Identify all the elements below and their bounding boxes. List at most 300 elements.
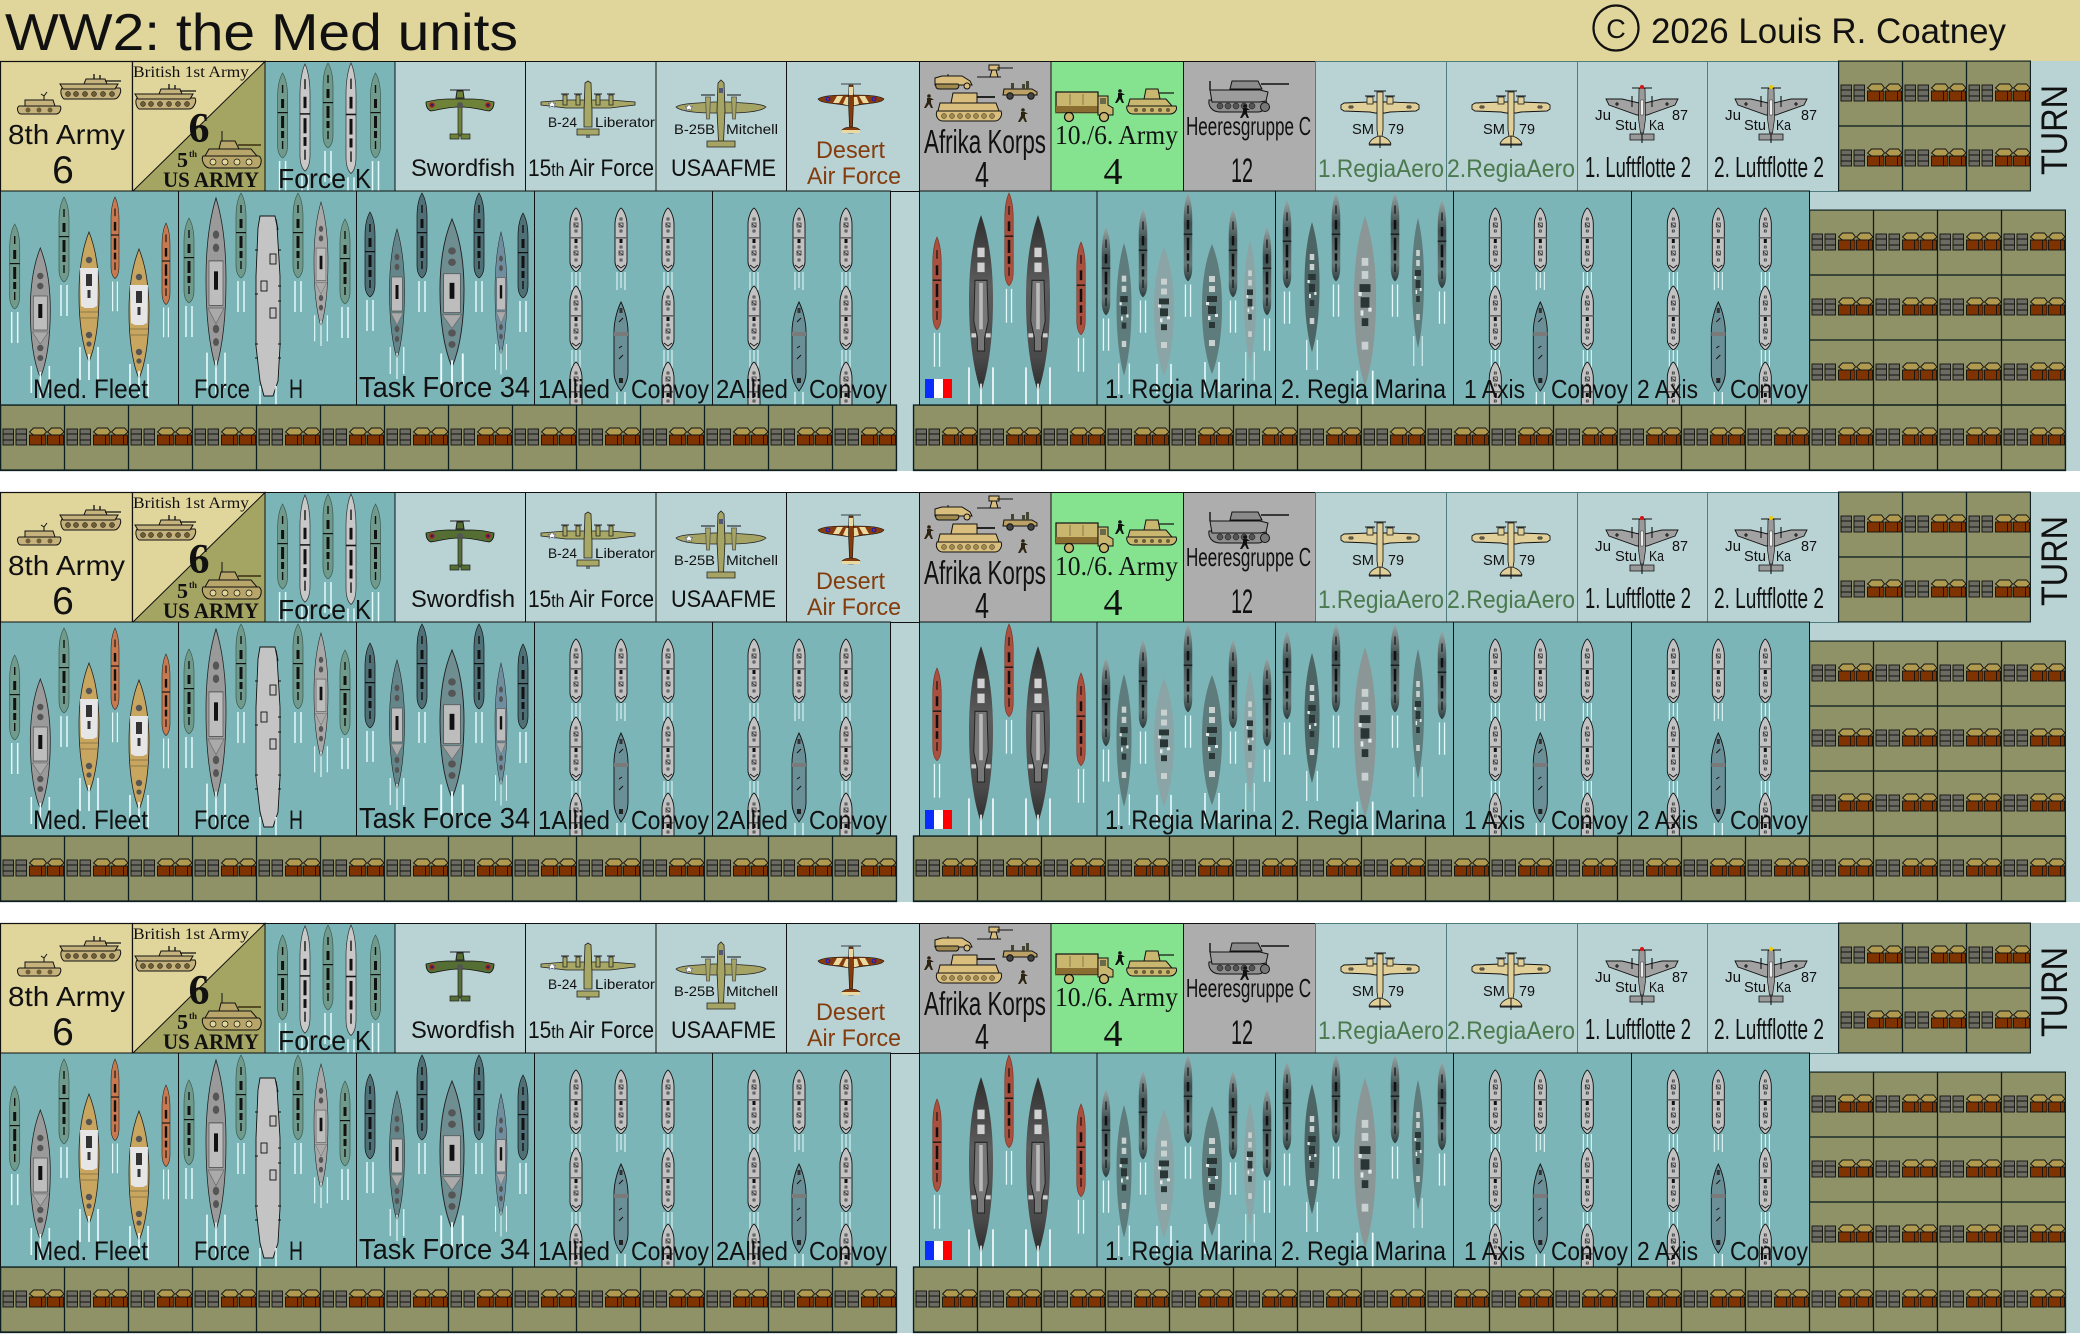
ships (184, 1055, 350, 1268)
text: British 1st Army, 6, 5th US ARMY: 5 (177, 148, 188, 172)
text: Force H: Force (194, 374, 250, 404)
text: Desert Air Force: Air Force (807, 163, 901, 190)
text: Ju 87 Stuka, 1. Luftflotte 2: Ju (1595, 107, 1611, 124)
ships (748, 1070, 852, 1306)
text: 2Allied Convoy (716, 374, 887, 404)
icon: Ju 87 Stuka (1606, 947, 1678, 1005)
icon: B-24 Liberator (541, 512, 635, 569)
text: 15th Air Force (528, 545, 655, 613)
panel: 1 Allied Convoy (534, 191, 712, 444)
supply cells: bottom left (0, 1267, 896, 1332)
text: 2Allied Convoy (716, 1236, 887, 1266)
text: British 1st Army, 6, 5th US ARMY: th (189, 580, 197, 590)
background strip (0, 492, 2080, 902)
text: 15th Air Force: Liberator (595, 545, 655, 561)
text: Ju 87 Stuka, 1. Luftflotte 2: Stu (1615, 117, 1637, 134)
text: 8th Army 6: 6 (52, 580, 74, 623)
ships (1667, 1070, 1771, 1306)
panel: 2 Allied Convoy (712, 1053, 890, 1306)
icon: Ju 87 Stuka (1735, 516, 1807, 574)
text: 1 Axis Convoy (1464, 374, 1628, 404)
text: 2 Axis Convoy: Convoy (1730, 805, 1808, 835)
text: British 1st Army, 6, 5th US ARMY (133, 64, 259, 192)
text: Force K: K (355, 163, 371, 194)
text: 10./6. Army 4: 4 (1104, 582, 1122, 624)
panel: 1. Regia Marina (1097, 191, 1276, 405)
ships (365, 624, 528, 821)
text: USAAFME (671, 121, 778, 182)
ships (933, 193, 1085, 419)
panel: 2 Axis Convoy (1632, 622, 1810, 875)
text: 15th Air Force: B-24 (548, 114, 577, 130)
icon: truck, soldier and tank (1055, 951, 1177, 984)
unit sheet 3 (0, 923, 2080, 1333)
supply cells: bottom right (914, 405, 2066, 470)
text: 2 Axis Convoy (1637, 805, 1808, 835)
text: 1Allied Convoy: Convoy (631, 1236, 709, 1266)
ships (748, 208, 852, 444)
panel: 2. Regia Marina (1276, 191, 1454, 410)
text: Ju 87 Stuka, 1. Luftflotte 2: Ka (1649, 548, 1665, 565)
ships (570, 639, 674, 875)
text: 2 Axis Convoy (1637, 1236, 1808, 1266)
supply cells: bottom right (914, 1267, 2066, 1332)
copyright notice: C (1606, 14, 1626, 44)
panel: 1 Axis Convoy (1454, 191, 1632, 444)
text: Force H (194, 1236, 303, 1266)
text: British 1st Army, 6, 5th US ARMY: US ARMY (163, 167, 259, 192)
text: Desert Air Force: Air Force (807, 594, 901, 621)
text: Heeresgruppe C 12 (1186, 542, 1311, 621)
panel: 15th Air Force (526, 924, 656, 1054)
text: USAAFME: B-25B (674, 121, 715, 137)
text: 1 Axis Convoy: Convoy (1551, 1236, 1628, 1266)
text: USAAFME: USAAFME (671, 1017, 776, 1044)
text: Afrika Korps 4: Afrika Korps (924, 985, 1046, 1022)
text: SM 79, 1.RegiaAero: 79 (1388, 983, 1404, 1000)
text: USAAFME: Mitchell (726, 983, 778, 999)
text: Ju 87 Stuka, 2. Luftflotte 2: 87 (1801, 107, 1817, 124)
text: Ju 87 Stuka, 2. Luftflotte 2: Ju (1725, 538, 1741, 555)
text: SM 79, 1.RegiaAero: 79 (1388, 552, 1404, 569)
panel: 2 Axis Convoy (1632, 191, 1810, 444)
icon: French flag (925, 1241, 952, 1260)
text: SM 79, 1.RegiaAero: SM (1352, 121, 1374, 138)
text: Afrika Korps 4 (924, 985, 1046, 1057)
ships (1102, 1055, 1271, 1256)
text: 1Allied Convoy (538, 1236, 709, 1266)
text: Force K: K (355, 594, 371, 625)
text: SM 79, 2.RegiaAero (1447, 121, 1575, 183)
panel: 1 Allied Convoy (534, 622, 712, 875)
icon: B-24 Liberator (541, 81, 635, 138)
text: Ju 87 Stuka, 2. Luftflotte 2: Stu (1744, 548, 1766, 565)
text: 2. Regia Marina: 2. Regia Marina (1281, 374, 1447, 404)
text: Heeresgruppe C 12: 12 (1231, 583, 1253, 621)
text: Heeresgruppe C 12: 12 (1231, 152, 1253, 190)
text: USAAFME: B-25B (674, 552, 715, 568)
text: USAAFME: USAAFME (671, 155, 776, 182)
panel: 1. Regia Marina (1097, 1053, 1276, 1267)
panel: Task Force 34 (356, 622, 534, 836)
ships (1283, 1055, 1446, 1272)
icon: truck, soldier and tank (1055, 89, 1177, 122)
text: 2 Axis Convoy: 2 Axis (1637, 374, 1698, 404)
text: Ju 87 Stuka, 2. Luftflotte 2: 87 (1801, 538, 1817, 555)
text: 2 Axis Convoy: Convoy (1730, 1236, 1808, 1266)
panel: 10./6. Army (1051, 924, 1184, 1055)
text: 15th Air Force: B-24 (548, 976, 577, 992)
text: Desert Air Force: Desert (816, 568, 885, 595)
icon: French flag (925, 379, 952, 398)
panel: Heeresgruppe C (1184, 924, 1316, 1054)
text: Ju 87 Stuka, 2. Luftflotte 2: Ka (1776, 979, 1792, 996)
icon: truck, soldier and tank (1055, 520, 1177, 552)
text: Afrika Korps 4: Afrika Korps (924, 554, 1046, 591)
background strip (0, 923, 2080, 1333)
ships (1489, 639, 1593, 875)
ships (365, 1055, 528, 1252)
text: 15th Air Force: 15th Air Force (528, 1017, 654, 1044)
text: SM 79, 1.RegiaAero: 1.RegiaAero (1318, 1017, 1444, 1045)
text: 2 Axis Convoy: Convoy (1730, 374, 1808, 404)
text: Heeresgruppe C 12 (1186, 111, 1311, 190)
panel: 1.RegiaAero (1316, 924, 1446, 1054)
icon: tanks (18, 505, 121, 545)
panel: 2. Luftflotte 2 (1708, 924, 1838, 1054)
text: 2 Axis Convoy: 2 Axis (1637, 1236, 1698, 1266)
text: 1 Axis Convoy (1464, 805, 1628, 835)
ships (1102, 624, 1271, 825)
text: 2 Axis Convoy (1637, 374, 1808, 404)
background strip (0, 61, 2080, 471)
text: Task Force 34: Task Force 34 (359, 372, 530, 404)
text: SM 79, 1.RegiaAero: 1.RegiaAero (1318, 586, 1444, 614)
supply cells: right block (1810, 1072, 2066, 1267)
panel: Task Force 34 (356, 1053, 534, 1267)
icon: Ju 87 Stuka (1735, 947, 1807, 1005)
text: Ju 87 Stuka, 1. Luftflotte 2: 87 (1672, 538, 1688, 555)
text: 10./6. Army 4: 10./6. Army (1055, 120, 1178, 150)
text: 1. Regia Marina: 1. Regia Marina (1105, 1236, 1273, 1266)
text: SM 79, 1.RegiaAero (1318, 552, 1444, 614)
text: 1 Axis Convoy: 1 Axis (1464, 1236, 1525, 1266)
text: 1. Regia Marina: 1. Regia Marina (1105, 374, 1273, 404)
text: 1 Axis Convoy: 1 Axis (1464, 805, 1525, 835)
text: Heeresgruppe C 12: Heeresgruppe C (1186, 542, 1311, 572)
text: Afrika Korps 4: 4 (975, 585, 989, 626)
title: WW2: the Med units (5, 4, 518, 62)
text: 1Allied Convoy: 1Allied (538, 805, 610, 835)
text: Ju 87 Stuka, 2. Luftflotte 2: Ka (1776, 117, 1792, 134)
text: British 1st Army, 6, 5th US ARMY: 6 (188, 968, 210, 1014)
panel: 2 Allied Convoy (712, 622, 890, 875)
icon: tanks (135, 515, 261, 599)
text: Ju 87 Stuka, 2. Luftflotte 2: Ka (1776, 548, 1792, 565)
icon: B-25B Mitchell (676, 511, 766, 578)
panel: 2. Luftflotte 2 (1708, 492, 1838, 622)
text: SM 79, 2.RegiaAero: 2.RegiaAero (1447, 1017, 1575, 1045)
text: 10./6. Army 4 (1055, 551, 1178, 624)
icon: tanks (18, 74, 121, 114)
text: SM 79, 2.RegiaAero: SM (1483, 121, 1505, 138)
icon: SM 79 (1341, 953, 1419, 1010)
panel: 2.RegiaAero (1446, 492, 1578, 622)
text: SM 79, 1.RegiaAero: SM (1352, 552, 1374, 569)
ships (1489, 1070, 1593, 1306)
panel: Swordfish (395, 62, 526, 192)
text: Ju 87 Stuka, 2. Luftflotte 2: 87 (1801, 969, 1817, 986)
text: Desert Air Force: Desert (816, 999, 885, 1026)
text: Ju 87 Stuka, 2. Luftflotte 2: 2. Luftflotte 2 (1714, 1014, 1824, 1046)
panel: Force K (265, 924, 395, 1080)
ships (1667, 208, 1771, 444)
ships (570, 1070, 674, 1306)
icon: Swordfish plane (426, 521, 494, 570)
panel: British 1st Army / 5th US Army (132, 62, 265, 192)
panel: Afrika Korps (920, 924, 1051, 1057)
text: 15th Air Force (528, 114, 655, 182)
ships (570, 208, 674, 444)
supply cells: top right (1838, 492, 2030, 622)
ships (1667, 639, 1771, 875)
text: Ju 87 Stuka, 1. Luftflotte 2 (1585, 107, 1691, 184)
text: SM 79, 2.RegiaAero: 2.RegiaAero (1447, 586, 1575, 614)
panel: French fleet (920, 191, 1097, 419)
ships (10, 628, 170, 829)
text: Desert Air Force: Desert (816, 137, 885, 164)
text: 2. Regia Marina: 2. Regia Marina (1281, 805, 1447, 835)
text: British 1st Army, 6, 5th US ARMY: 6 (188, 106, 210, 152)
supply cells: top right (1838, 923, 2030, 1053)
text: Ju 87 Stuka, 1. Luftflotte 2: Ju (1595, 538, 1611, 555)
text: 2Allied Convoy: Convoy (809, 1236, 887, 1266)
icon: desert fighter (818, 946, 884, 995)
text: 1 Axis Convoy: 1 Axis (1464, 374, 1525, 404)
text: Ju 87 Stuka, 2. Luftflotte 2: Stu (1744, 117, 1766, 134)
panel: 15th Air Force (526, 62, 656, 192)
text: 8th Army 6: 6 (52, 149, 74, 192)
panel: Heeresgruppe C (1184, 62, 1316, 192)
text: 15th Air Force: B-24 (548, 545, 577, 561)
panel: Force H (178, 622, 356, 837)
text: Desert Air Force (807, 137, 901, 190)
panel: Force K (265, 62, 395, 218)
ships (933, 1055, 1085, 1281)
text: Swordfish: Swordfish (411, 1017, 515, 1044)
icon: SM 79 (1472, 91, 1550, 148)
text: Task Force 34: Task Force 34 (359, 803, 530, 835)
text: Ju 87 Stuka, 2. Luftflotte 2 (1714, 538, 1824, 615)
icon: tanks (18, 936, 121, 976)
panel: Force H (178, 191, 356, 406)
text: Task Force 34: Task Force 34 (359, 1234, 530, 1266)
icon: B-25B Mitchell (676, 942, 766, 1009)
text: British 1st Army, 6, 5th US ARMY: th (189, 149, 197, 159)
text: 10./6. Army 4: 4 (1104, 151, 1122, 193)
text: Afrika Korps 4: Afrika Korps (924, 123, 1046, 160)
icon: desert fighter (818, 84, 884, 133)
text: TURN: TURN (2034, 85, 2075, 175)
text: 10./6. Army 4 (1055, 120, 1178, 193)
text: Desert Air Force: Air Force (807, 1025, 901, 1052)
text: SM 79, 2.RegiaAero: 79 (1519, 552, 1535, 569)
panel: 2. Luftflotte 2 (1708, 62, 1838, 192)
text: 10./6. Army 4: 4 (1104, 1013, 1122, 1055)
ships (1283, 624, 1446, 841)
supply cells: bottom left (0, 405, 896, 470)
text: TURN: TURN (2034, 516, 2075, 606)
panel: 1 Allied Convoy (534, 1053, 712, 1306)
text: 2 Axis Convoy: 2 Axis (1637, 805, 1698, 835)
text: Force H (194, 374, 303, 404)
text: British 1st Army, 6, 5th US ARMY (133, 926, 259, 1054)
icon: tanks (135, 84, 261, 168)
text: USAAFME: Mitchell (726, 121, 778, 137)
text: Ju 87 Stuka, 1. Luftflotte 2: Ka (1649, 117, 1665, 134)
text: Swordfish: Swordfish (411, 155, 515, 182)
text: Med. Fleet: Med. Fleet (33, 805, 148, 835)
text: Med. Fleet: Med. Fleet (33, 1236, 148, 1266)
panel: 2.RegiaAero (1446, 62, 1578, 192)
text: SM 79, 2.RegiaAero (1447, 552, 1575, 614)
icon: Swordfish plane (426, 952, 494, 1001)
icon: SM 79 (1472, 522, 1550, 579)
panel: Desert Air Force (786, 492, 920, 622)
panel: Heeresgruppe C (1184, 492, 1316, 622)
text: Heeresgruppe C 12: Heeresgruppe C (1186, 973, 1311, 1003)
text: 1 Axis Convoy: Convoy (1551, 374, 1628, 404)
text: Force K: Force (278, 163, 346, 194)
text: Ju 87 Stuka, 1. Luftflotte 2: Stu (1615, 979, 1637, 996)
title band (0, 0, 2080, 61)
icon: vehicles and troops (924, 496, 1037, 553)
ships (184, 193, 350, 406)
ships (748, 639, 852, 875)
text: 2Allied Convoy: 2Allied (716, 1236, 788, 1266)
panel: French fleet (920, 622, 1097, 850)
text: USAAFME: Mitchell (726, 552, 778, 568)
panel: Med. Fleet (0, 1053, 178, 1267)
text: USAAFME (671, 983, 778, 1044)
text: Afrika Korps 4 (924, 554, 1046, 626)
text: 15th Air Force (528, 976, 655, 1044)
text: Ju 87 Stuka, 1. Luftflotte 2: 87 (1672, 107, 1688, 124)
panel: 1.RegiaAero (1316, 492, 1446, 622)
text: British 1st Army, 6, 5th US ARMY: 5 (177, 579, 188, 603)
text: TURN: TURN (2034, 947, 2075, 1037)
text: Ju 87 Stuka, 2. Luftflotte 2: 2. Luftflotte 2 (1714, 583, 1824, 615)
text: Ju 87 Stuka, 1. Luftflotte 2: 87 (1672, 969, 1688, 986)
text: 2Allied Convoy: Convoy (809, 374, 887, 404)
panel: 2 Allied Convoy (712, 191, 890, 444)
text: 8th Army 6: 6 (52, 1011, 74, 1054)
panel: 1.RegiaAero (1316, 62, 1446, 192)
text: Force H: H (289, 1236, 303, 1266)
icon: SM 79 (1341, 522, 1419, 579)
panel: 1. Regia Marina (1097, 622, 1276, 836)
ships (10, 197, 170, 398)
icon: halftrack and tank (1209, 81, 1289, 118)
panel: 8th Army (0, 924, 132, 1054)
text: British 1st Army, 6, 5th US ARMY: US ARMY (163, 598, 259, 623)
panel: 8th Army (0, 492, 132, 623)
text: 10./6. Army 4: 10./6. Army (1055, 982, 1178, 1012)
text: 2Allied Convoy: 2Allied (716, 805, 788, 835)
text: Force H: Force (194, 1236, 250, 1266)
text: Ju 87 Stuka, 2. Luftflotte 2: 2. Luftflotte 2 (1714, 152, 1824, 184)
ships (184, 624, 350, 837)
supply cells: right block (1810, 210, 2066, 405)
icon: French flag (925, 810, 952, 829)
text: Afrika Korps 4 (924, 123, 1046, 195)
text: USAAFME (671, 552, 778, 613)
icon: B-25B Mitchell (676, 80, 766, 147)
panel: British 1st Army / 5th US Army (132, 492, 265, 623)
text: Ju 87 Stuka, 2. Luftflotte 2 (1714, 107, 1824, 184)
panel: Desert Air Force (786, 924, 920, 1054)
panel: 1. Luftflotte 2 (1578, 924, 1708, 1054)
panel: Med. Fleet (0, 622, 178, 836)
panel: Force K (265, 492, 395, 649)
text: SM 79, 1.RegiaAero (1318, 121, 1444, 183)
panel: Swordfish (395, 924, 526, 1054)
panel: 2. Regia Marina (1276, 622, 1454, 841)
text: 8th Army 6: 8th Army (8, 981, 125, 1012)
copyright notice: 2026 Louis R. Coatney (1651, 12, 2006, 51)
text: 8th Army 6 (8, 550, 125, 623)
text: Heeresgruppe C 12: 12 (1231, 1014, 1253, 1052)
text: 15th Air Force: 15th Air Force (528, 586, 654, 613)
panel: Task Force 34 (356, 191, 534, 405)
panel: Desert Air Force (786, 62, 920, 192)
panel: 1 Axis Convoy (1454, 1053, 1632, 1306)
supply cells: top right (1838, 61, 2030, 191)
panel: Swordfish (395, 492, 526, 622)
ships (278, 63, 380, 218)
panel: Med. Fleet (0, 191, 178, 405)
text: Force H: H (289, 374, 303, 404)
text: Afrika Korps 4: 4 (975, 154, 989, 195)
text: 1Allied Convoy (538, 374, 709, 404)
text: 2Allied Convoy (716, 805, 887, 835)
text: SM 79, 1.RegiaAero: 1.RegiaAero (1318, 155, 1444, 183)
text: SM 79, 2.RegiaAero: 2.RegiaAero (1447, 155, 1575, 183)
panel: USAAFME (656, 924, 786, 1054)
text: SM 79, 2.RegiaAero (1447, 983, 1575, 1045)
text: SM 79, 1.RegiaAero (1318, 983, 1444, 1045)
text: USAAFME: USAAFME (671, 586, 776, 613)
icon: Swordfish plane (426, 90, 494, 139)
text: 10./6. Army 4 (1055, 982, 1178, 1055)
icon: tanks (135, 946, 261, 1030)
panel: USAAFME (656, 492, 786, 622)
text: Desert Air Force (807, 999, 901, 1052)
text: 1Allied Convoy: Convoy (631, 805, 709, 835)
text: 1Allied Convoy: 1Allied (538, 374, 610, 404)
text: British 1st Army, 6, 5th US ARMY: British 1st Army (133, 495, 249, 512)
text: Ju 87 Stuka, 1. Luftflotte 2: 1. Luftflotte 2 (1585, 152, 1691, 184)
text: 2. Regia Marina: 2. Regia Marina (1281, 1236, 1447, 1266)
panel: Afrika Korps (920, 62, 1051, 195)
text: SM 79, 2.RegiaAero: 79 (1519, 983, 1535, 1000)
text: Force K: Force (278, 594, 346, 625)
text: British 1st Army, 6, 5th US ARMY: 5 (177, 1010, 188, 1034)
text: Heeresgruppe C 12 (1186, 973, 1311, 1052)
text: 10./6. Army 4: 10./6. Army (1055, 551, 1178, 581)
icon: SM 79 (1472, 953, 1550, 1010)
panel: Force H (178, 1053, 356, 1268)
